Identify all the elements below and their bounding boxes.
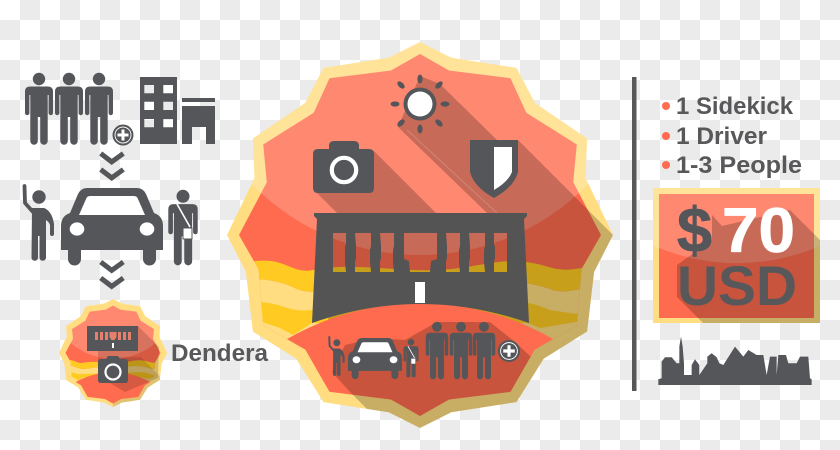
icon: sidekick with bag [168, 190, 198, 265]
badge background [185, 0, 655, 435]
icon: car [61, 188, 163, 266]
figures on hill: waving person [329, 337, 345, 376]
icon: waving person [24, 186, 54, 261]
figures on hill: sidekick [404, 339, 418, 377]
main badge [227, 42, 613, 428]
small badge camera [98, 356, 128, 383]
small badge temple [87, 326, 138, 351]
price box [653, 188, 820, 323]
list: what's included: 1 Driver [676, 123, 767, 150]
shadow of figures on hill [332, 322, 530, 416]
small Dendera badge [59, 299, 167, 407]
foreground hill [220, 303, 620, 445]
icon: camera [313, 141, 374, 193]
price amount [677, 196, 795, 266]
icon: shield [470, 140, 518, 198]
temple building with road [312, 213, 529, 323]
icon: sun [390, 74, 450, 134]
price amount: $ [677, 196, 712, 266]
long shadow of icons and temple [317, 77, 613, 428]
figures on hill: car [348, 338, 402, 379]
list: what's included [662, 93, 802, 179]
list: what's included: 1 Sidekick [676, 93, 794, 120]
icon: buildings [140, 77, 215, 144]
icons: group of people [25, 73, 113, 145]
price amount: 70 [722, 196, 795, 266]
price currency: USD [677, 254, 797, 317]
figures on hill: people [426, 322, 495, 379]
arrow: double chevron down [101, 154, 123, 178]
list: what's included: 1-3 People [676, 152, 802, 179]
arrow: double chevron down lower [101, 262, 123, 286]
vertical divider [632, 77, 636, 391]
figures on hill: plus [498, 340, 520, 362]
label: Dendera: Dendera [171, 340, 269, 367]
skyline silhouette [658, 337, 812, 385]
icon: plus badge [112, 124, 134, 146]
